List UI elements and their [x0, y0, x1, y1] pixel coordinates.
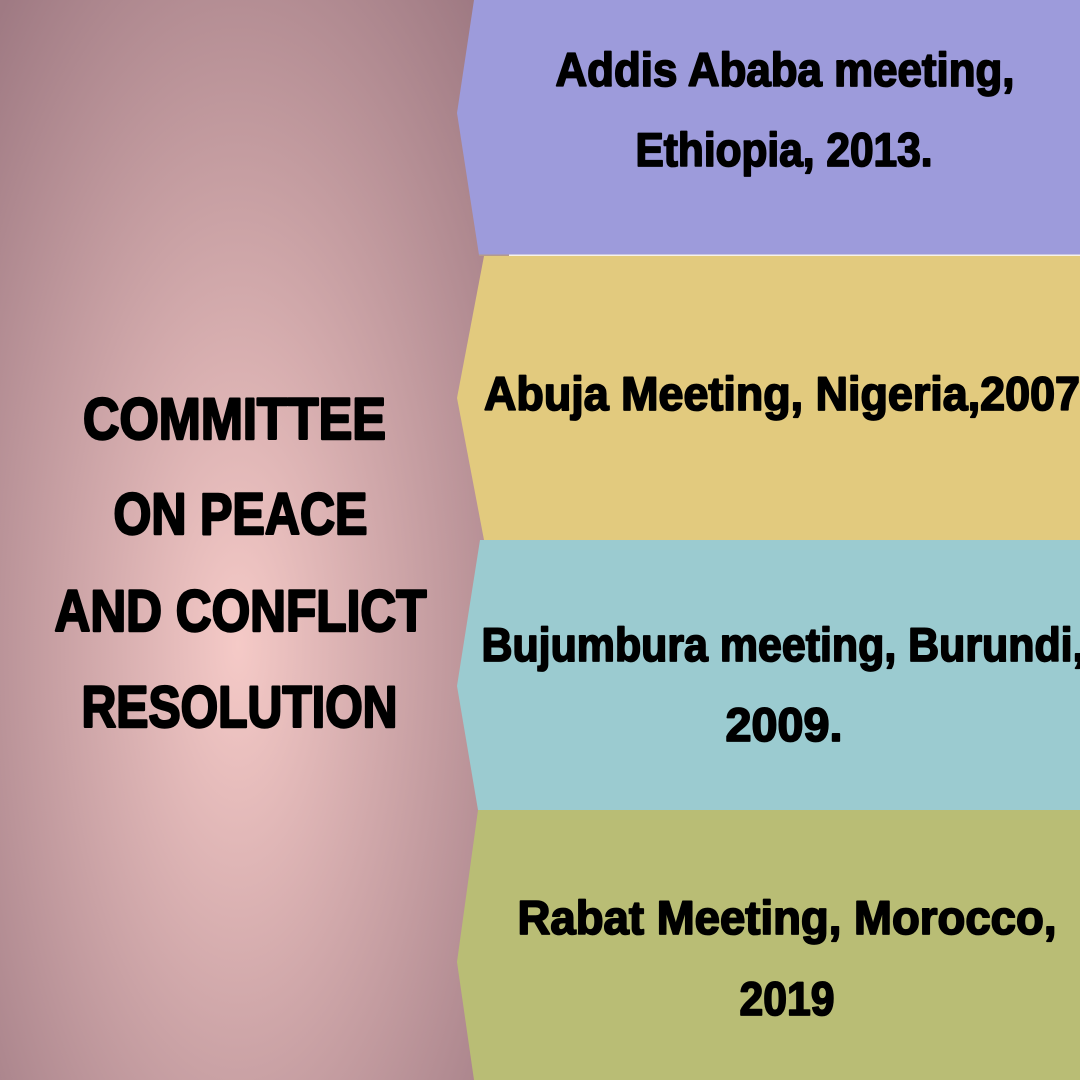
title: committee on peace and conflict resolution: ON PEACE: [114, 482, 368, 547]
panel: Addis Ababa meeting: Addis Ababa meeting,: [556, 43, 1014, 96]
title: committee on peace and conflict resolution: RESOLUTION: [82, 675, 398, 740]
panel: Bujumbura meeting: [457, 540, 1080, 810]
title: committee on peace and conflict resolution: [54, 387, 426, 740]
panel: Rabat meeting: Rabat Meeting, Morocco,: [518, 891, 1056, 944]
panel: Addis Ababa meeting: [457, 0, 1080, 256]
panel: Addis Ababa meeting: Ethiopia, 2013.: [636, 123, 932, 176]
panel: Abuja meeting: [457, 256, 1080, 540]
panel: Rabat meeting: [457, 810, 1080, 1080]
panel: Bujumbura meeting: 2009.: [726, 698, 842, 751]
title: committee on peace and conflict resolution: AND CONFLICT: [54, 579, 426, 644]
panel: Rabat meeting: 2019: [740, 972, 834, 1025]
title: committee on peace and conflict resolution: COMMITTEE: [83, 387, 386, 452]
